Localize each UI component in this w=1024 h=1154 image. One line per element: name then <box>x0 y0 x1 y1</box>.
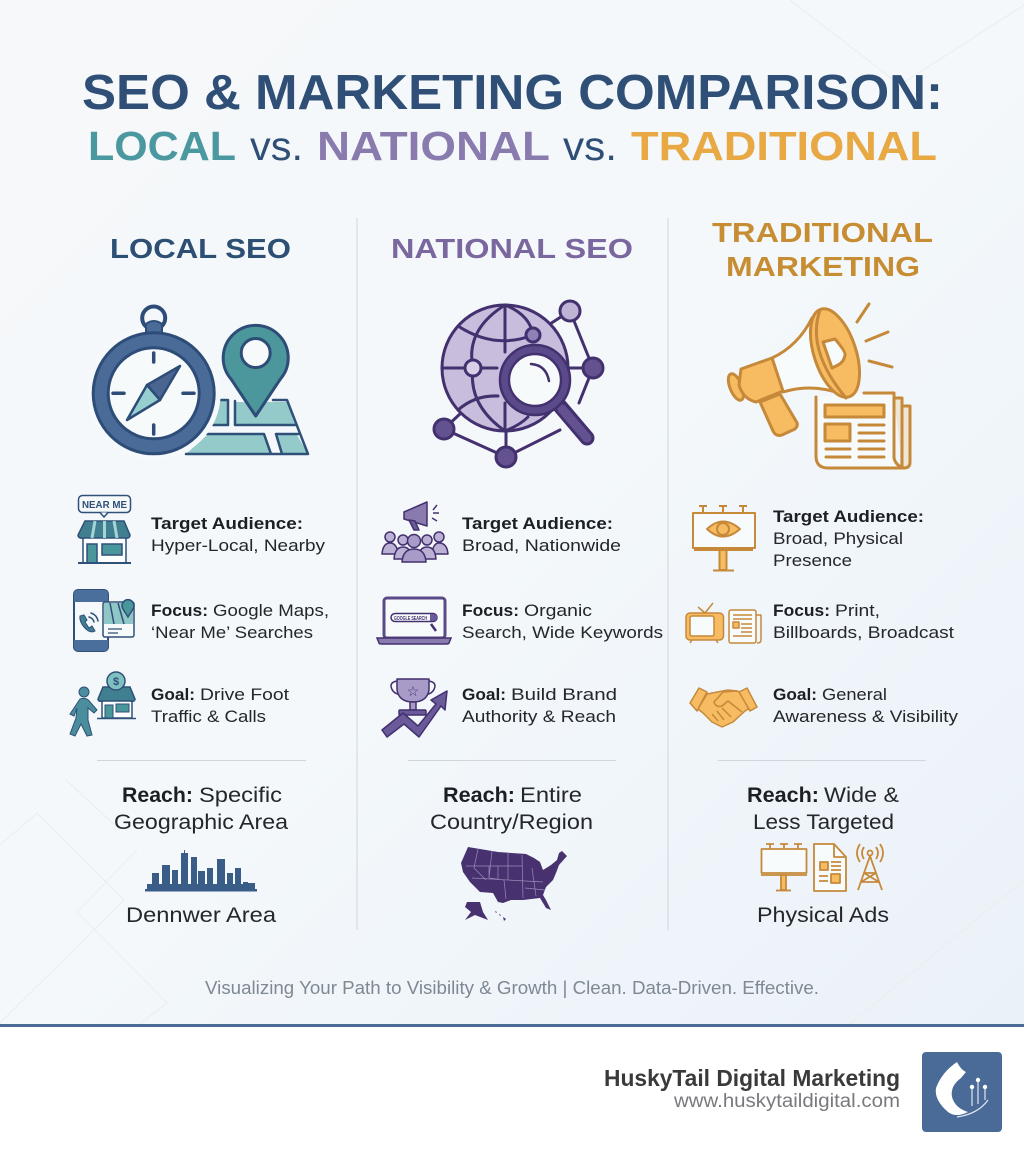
text: reach: Wide & <box>824 784 899 807</box>
panel: National SEO <box>377 233 663 921</box>
title: vs. <box>250 123 303 169</box>
text: target audience: Target Audience: <box>462 514 613 533</box>
text: goal: Goal: <box>773 685 817 704</box>
text: target audience: Target Audience: <box>151 514 303 533</box>
item: target audience <box>78 496 326 563</box>
text: focus: ‘Near Me’ Searches <box>151 623 313 642</box>
icon: near me storefront <box>78 496 131 563</box>
item: focus <box>686 601 954 643</box>
icon: handshake <box>690 688 757 727</box>
icon: trophy and growth arrow <box>382 679 447 737</box>
brand name: HuskyTail Digital Marketing <box>604 1065 900 1091</box>
label: physical ads: Physical Ads <box>757 904 889 927</box>
icon: compass and map pin <box>87 306 308 460</box>
text: reach: Geographic Area <box>114 811 288 834</box>
text: focus <box>151 601 329 642</box>
text: focus: Google Maps, <box>213 601 329 620</box>
text: goal: Goal: <box>462 685 506 704</box>
text: goal <box>151 685 289 726</box>
heading: Traditional Marketing <box>712 217 933 282</box>
panel: Local SEO <box>70 233 329 927</box>
icon: United States map <box>461 847 567 921</box>
text: target audience: Presence <box>773 551 852 570</box>
heading: Traditional Marketing: TRADITIONAL <box>712 217 933 248</box>
title: NATIONAL <box>317 123 550 169</box>
text: focus: Billboards, Broadcast <box>773 623 954 642</box>
column divider right <box>668 218 669 930</box>
logo <box>922 1052 1002 1132</box>
text: focus: Focus: <box>151 601 208 620</box>
text: goal: Drive Foot <box>200 685 289 704</box>
title: vs. <box>563 123 617 169</box>
text: goal: General <box>822 685 887 704</box>
item: target audience <box>382 502 621 562</box>
tagline: Visualizing Your Path to Visibility & Growth | Clean. Data-Driven. Effective. <box>205 978 819 998</box>
item: target audience <box>693 506 924 570</box>
icon: walker and shop <box>70 672 136 736</box>
text: reach <box>114 784 288 834</box>
text: goal: Authority & Reach <box>462 707 616 726</box>
text: reach <box>747 784 899 834</box>
title: SEO & MARKETING COMPARISON: <box>82 66 943 120</box>
title <box>82 66 943 169</box>
icon: billboard, flyer and radio tower <box>761 844 883 891</box>
title: TRADITIONAL <box>631 123 937 169</box>
text: goal: Build Brand <box>511 685 617 704</box>
text: goal: Goal: <box>151 685 195 704</box>
text: focus: Focus: <box>462 601 519 620</box>
text: target audience <box>773 507 924 570</box>
text: reach: Country/Region <box>430 811 593 834</box>
icon: laptop search: GOOGLE SEARCH <box>394 616 427 622</box>
text: target audience <box>151 514 326 555</box>
website: www.huskytaildigital.com <box>673 1091 900 1112</box>
text: reach: Specific <box>199 784 282 807</box>
text: goal: Awareness & Visibility <box>773 707 959 726</box>
item: goal <box>70 672 289 736</box>
heading: National SEO: NATIONAL SEO <box>391 233 633 264</box>
text: reach: Reach: <box>747 784 819 807</box>
text: target audience: Broad, Physical <box>773 529 903 548</box>
icon: megaphone and people <box>382 502 448 562</box>
text: reach: Less Targeted <box>753 811 894 834</box>
text: target audience: Broad, Nationwide <box>462 536 621 555</box>
item: goal <box>382 679 617 737</box>
text: target audience: Target Audience: <box>773 507 924 526</box>
text: goal: Traffic & Calls <box>151 707 266 726</box>
item: focus <box>377 598 663 644</box>
text: focus: Organic <box>524 601 593 620</box>
text: goal <box>773 685 959 726</box>
heading: Local SEO: LOCAL SEO <box>110 233 291 264</box>
icon: television and newspaper <box>686 603 761 643</box>
footer band <box>0 1024 1024 1154</box>
item: focus <box>74 590 329 651</box>
icon: globe with magnifier and network <box>434 301 603 467</box>
text: goal <box>462 685 617 726</box>
icon: phone and map card <box>74 590 134 651</box>
icon: billboard with eye <box>693 506 755 570</box>
icon: laptop search <box>377 598 451 644</box>
item: goal <box>690 685 959 727</box>
column divider left <box>356 218 358 930</box>
icon: near me storefront: NEAR ME <box>82 499 127 511</box>
icon: city skyline <box>145 850 257 892</box>
text: reach: Reach: <box>122 784 193 807</box>
text: focus: Focus: <box>773 601 830 620</box>
icon: walker and shop: $ <box>113 676 119 688</box>
text: focus <box>462 601 663 642</box>
text: reach <box>430 784 593 834</box>
text: focus: Print, <box>835 601 880 620</box>
label: area: Dennwer Area <box>126 904 276 927</box>
heading: Traditional Marketing: MARKETING <box>726 251 920 282</box>
text: focus <box>773 601 954 642</box>
icon: trophy and growth arrow: ☆ <box>407 683 419 699</box>
panel: Traditional Marketing <box>686 217 959 927</box>
text: reach: Reach: <box>443 784 515 807</box>
icon: megaphone and newspaper <box>725 303 910 468</box>
text: target audience: Hyper-Local, Nearby <box>151 536 326 555</box>
text: focus: Search, Wide Keywords <box>462 623 663 642</box>
title: LOCAL <box>88 123 236 169</box>
text: target audience <box>462 514 621 555</box>
text: reach: Entire <box>520 784 582 807</box>
